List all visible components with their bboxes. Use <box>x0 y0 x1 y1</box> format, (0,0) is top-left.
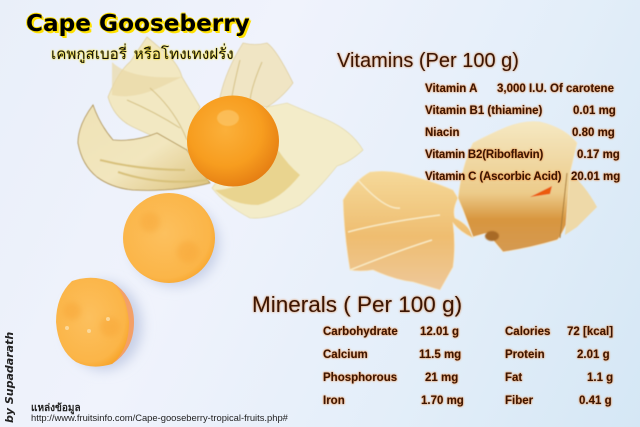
row: vitamin B2: 0.17 mg <box>577 149 620 161</box>
row: vitamin B2: Vitamin B2(Riboflavin) <box>425 149 543 161</box>
heading: minerals: Minerals ( Per 100 g) <box>252 292 462 317</box>
row: phosphorous and fat <box>322 370 614 385</box>
row: phosphorous and fat: 21 mg <box>425 372 458 384</box>
row: vitamin B1: Vitamin B1 (thiamine) <box>425 105 542 117</box>
row: iron and fiber: Iron <box>323 395 345 407</box>
row: iron and fiber: 0.41 g <box>579 395 612 407</box>
row: phosphorous and fat: 1.1 g <box>587 372 613 384</box>
row: calcium and protein: Protein <box>505 349 545 361</box>
row: carbohydrate and calories: 12.01 g <box>420 326 459 338</box>
row: iron and fiber: Fiber <box>505 395 533 407</box>
panel: vitamins <box>336 50 622 184</box>
row: carbohydrate and calories: Carbohydrate <box>323 326 398 338</box>
source url: http://www.fruitsinfo.com/Cape-gooseberry-tropical-fruits.php# <box>31 412 288 423</box>
row: vitamin C: Vitamin C (Ascorbic Acid) <box>425 171 561 183</box>
title: Cape Gooseberry <box>26 10 250 37</box>
row: vitamin B2 <box>424 148 621 162</box>
row: vitamin B1: 0.01 mg <box>573 105 616 117</box>
row: vitamin B1 <box>424 104 617 118</box>
thai subtitle: เคพกูสเบอรี่ หรือโทงเทงฝรั่ง <box>51 42 234 64</box>
row: carbohydrate and calories <box>322 324 614 340</box>
fruit: whole orange gooseberry <box>187 96 279 186</box>
row: calcium and protein: 11.5 mg <box>419 349 461 361</box>
credit: by Supadarath: by Supadarath <box>3 332 16 423</box>
row: vitamin C <box>424 170 622 184</box>
husk: open papery husk around whole fruit <box>78 37 363 218</box>
row: calcium and protein: Calcium <box>323 349 368 361</box>
panel: minerals <box>252 292 614 408</box>
fruit: cut half, lower <box>56 278 142 370</box>
row: niacin <box>424 126 616 140</box>
row: iron and fiber <box>322 394 612 408</box>
husk: closed husk, right <box>458 122 597 252</box>
row: carbohydrate and calories: Calories <box>505 326 550 338</box>
row: niacin: Niacin <box>425 127 460 139</box>
fruit: cut half, upper <box>123 193 219 286</box>
row: vitamin A: 3,000 I.U. Of carotene <box>497 83 614 95</box>
source label thai: แหล่งข้อมูล <box>31 399 81 414</box>
row: niacin: 0.80 mg <box>572 127 615 139</box>
row: iron and fiber: 1.70 mg <box>421 395 464 407</box>
heading: vitamins: Vitamins (Per 100 g) <box>337 50 519 72</box>
row: calcium and protein <box>322 348 610 362</box>
row: carbohydrate and calories: 72 [kcal] <box>567 326 613 338</box>
row: vitamin A: Vitamin A <box>425 83 477 95</box>
row: vitamin A <box>424 82 615 95</box>
husk: closed husk, left <box>343 171 473 290</box>
row: phosphorous and fat: Phosphorous <box>323 372 397 384</box>
row: vitamin C: 20.01 mg <box>571 171 620 183</box>
row: phosphorous and fat: Fat <box>505 372 522 384</box>
row: calcium and protein: 2.01 g <box>577 349 610 361</box>
